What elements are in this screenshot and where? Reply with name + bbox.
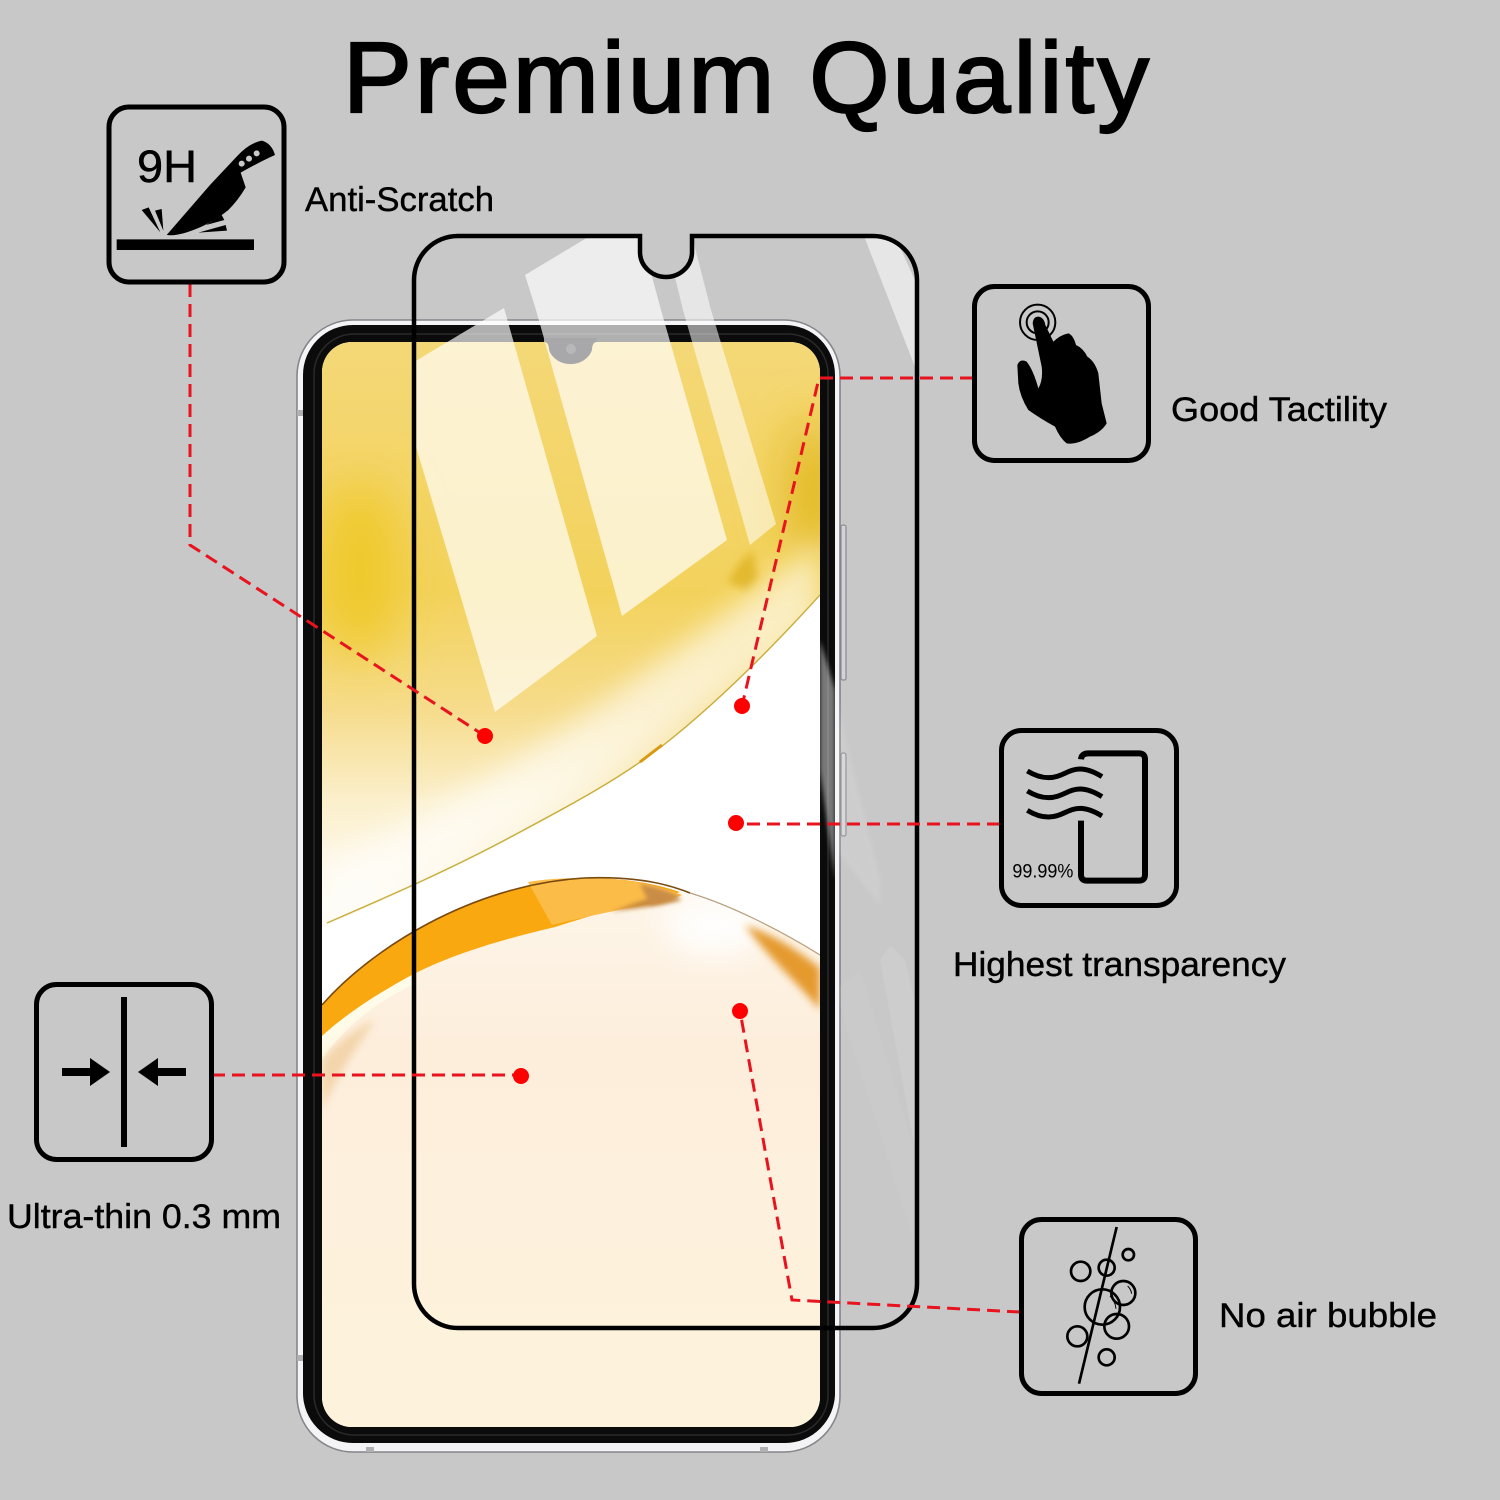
- dark rim of the dome: [322, 878, 690, 1005]
- phone side buttons: [841, 525, 846, 836]
- phone screen: [320, 342, 840, 1427]
- phone frame stubs: [297, 410, 768, 1452]
- thin golden curve: [327, 595, 820, 923]
- orange band left: [322, 878, 680, 1036]
- white sheen on the curve: [322, 540, 820, 928]
- dark amber reflection: [728, 550, 758, 590]
- reflection streak top right: [865, 238, 915, 366]
- white glare at top of dome: [665, 895, 765, 955]
- upper yellow wallpaper: [322, 342, 820, 928]
- phone: [297, 320, 846, 1452]
- icon: 9H knife: [109, 107, 284, 282]
- title: Premium Quality: [343, 22, 1152, 134]
- reflection streaks lower right: [880, 945, 917, 1160]
- leader: anti-scratch: [190, 284, 485, 736]
- label: anti-scratch: Anti-Scratch: [305, 181, 494, 219]
- glass reflections: [414, 236, 917, 1250]
- leader: transparency: [736, 822, 1000, 826]
- leader: no air bubble: [740, 1011, 1020, 1312]
- icon: touch hand: [974, 286, 1148, 460]
- icon: ultra-thin: [36, 984, 212, 1160]
- icon: 9H knife: 9H: [137, 141, 197, 192]
- phone bezel: [303, 325, 835, 1443]
- orange band fragment at right: [745, 925, 820, 1010]
- icon: no air bubble: [1022, 1220, 1196, 1394]
- orange band right tone: [528, 878, 682, 925]
- yellow highlights: [320, 420, 840, 660]
- label: good tactility: Good Tactility: [1171, 391, 1387, 429]
- reflection pane 2: [525, 236, 727, 616]
- leader dots: [477, 698, 750, 1084]
- reflection pane 3: [675, 245, 776, 545]
- icon: transparency: 99.99%: [1012, 861, 1073, 882]
- reflection on bezel right: [820, 640, 835, 880]
- reflection pane 1: [414, 308, 597, 712]
- leader: good tactility: [742, 378, 973, 706]
- leader: ultra-thin: [212, 1074, 521, 1076]
- label: highest transparency: Highest transparency: [953, 946, 1286, 984]
- icon: transparency: [1002, 730, 1176, 906]
- label: ultra-thin: Ultra-thin 0.3 mm: [7, 1198, 281, 1236]
- pale lower band: [322, 975, 412, 1060]
- phone frame: [297, 320, 840, 1452]
- lower cream dome: [322, 878, 820, 1427]
- screen protector outline: [414, 236, 917, 1328]
- camera notch: [544, 338, 597, 364]
- leader lines: [190, 284, 1020, 1312]
- label: no air bubble: No air bubble: [1219, 1297, 1437, 1335]
